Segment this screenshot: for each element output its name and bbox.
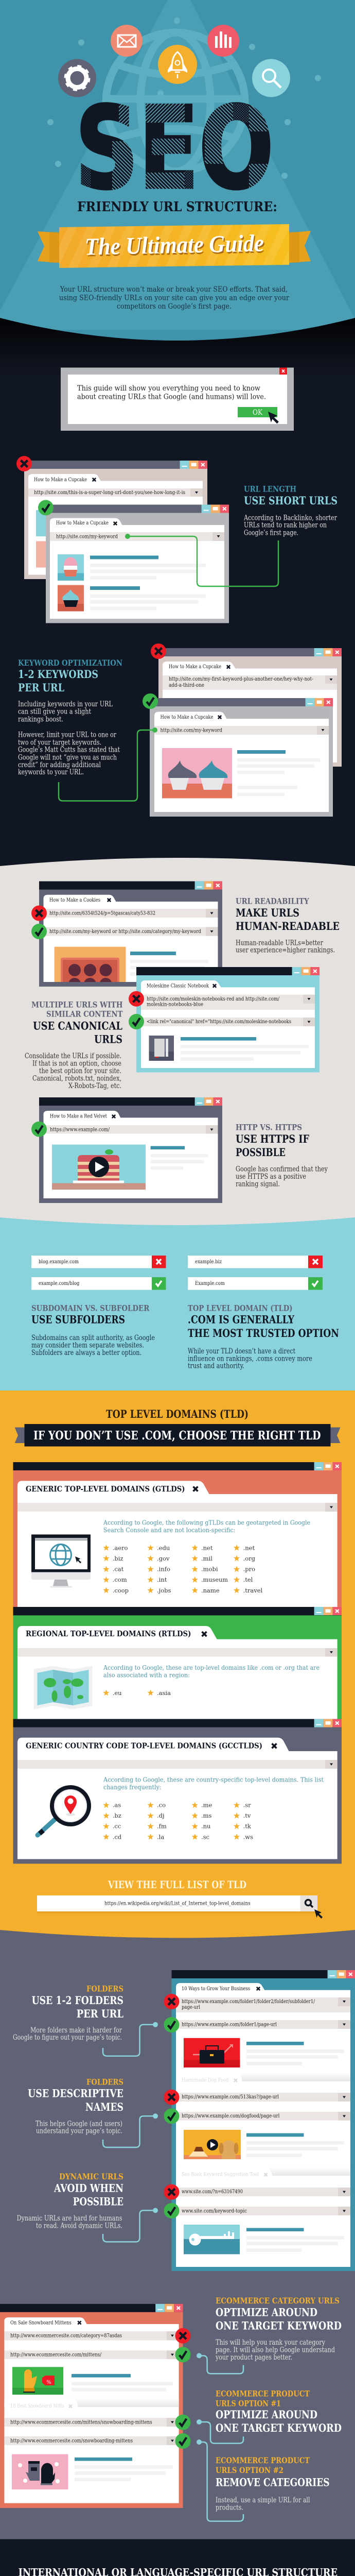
- text: canonical URLs: Consolidate the URLs if possible.: [25, 1052, 121, 1060]
- text: use 1-2 folders: [13, 1984, 123, 2042]
- text: ecommerce product option 2: [216, 2455, 330, 2512]
- panel: subdomain vs subfolder: [31, 1256, 166, 1357]
- connector: keyword: [59, 727, 157, 801]
- connector: short URL: [125, 534, 278, 586]
- panel: subdomain vs subfolder: Subfolders are always a better option.: [31, 1349, 141, 1357]
- panel: top level domain: Example.com: [195, 1280, 225, 1286]
- faded tab: dog food: [176, 2073, 350, 2083]
- list: country code TLDs: .sc: [201, 1833, 209, 1840]
- text: ecommerce category URLs: OPTIMIZE AROUND: [216, 2306, 317, 2318]
- list: country code TLDs: .bz: [113, 1812, 121, 1819]
- text: HTTP vs HTTPS: USE HTTPS IF: [236, 1132, 309, 1145]
- browser: short URL: How to Make a Cupcake: [56, 520, 109, 526]
- list: country code TLDs: .fm: [157, 1823, 167, 1830]
- icon: magnifier: [252, 59, 290, 97]
- icon: rocket: [158, 45, 197, 84]
- browser: generic country code TLDs: GENERIC COUNTRY CODE TOP-LEVEL DOMAINS (GCCTLDS): [26, 1741, 262, 1750]
- ribbon: the ultimate guide: The Ultimate Guide: [85, 231, 265, 262]
- panel: top level domain: example.biz: [195, 1259, 222, 1265]
- search bar: full list of TLD: https://en.wikipedia.org/wiki/List_of_Internet_top-level_domains: [104, 1900, 251, 1906]
- browser: keyword URL: http://site.com/my-keyword: [161, 727, 222, 734]
- list: country code TLDs: .co: [157, 1801, 166, 1808]
- text: URL length: URL LENGTH: [244, 484, 296, 494]
- list: country code TLDs: .dj: [157, 1812, 165, 1819]
- list: generic TLDs: .mil: [201, 1555, 212, 1562]
- ribbon: the ultimate guide: The Ultimate Guide: [84, 230, 264, 261]
- text: keyword optimization: keywords to your URL.: [18, 768, 84, 776]
- browser: generic country code TLDs: changes frequently:: [103, 1784, 162, 1791]
- text: HTTP vs HTTPS: ranking signal.: [236, 1180, 280, 1188]
- browser: folders stack: https://www.example.com/folder1/page-url: [182, 2022, 277, 2028]
- list: country code TLDs: .ms: [201, 1812, 212, 1819]
- text: ecommerce product option 1: OPTIMIZE AROUND: [216, 2408, 317, 2421]
- icon: monitor globe: [31, 1534, 91, 1588]
- intro paragraph: [59, 285, 290, 311]
- text: ecommerce product option 2: REMOVE CATEGORIES: [216, 2476, 330, 2488]
- browser: regional TLDs: REGIONAL TOP-LEVEL DOMAINS (RTLDS): [26, 1630, 191, 1638]
- list: country code TLDs: .la: [157, 1833, 164, 1840]
- illustration: sale mitten: %: [46, 2380, 51, 2385]
- text: URL length: [243, 484, 338, 537]
- faded tab: dog food: Homemade Dog Food: [182, 2077, 229, 2083]
- text: use descriptive names: FOLDERS: [86, 2077, 123, 2087]
- list: generic TLDs: .mobi: [201, 1565, 218, 1572]
- background globe and dots: [47, 18, 321, 179]
- browser: moleskine canonical: [136, 967, 319, 1072]
- text: dynamic URLs: DYNAMIC URLS: [59, 2172, 123, 2181]
- list: country code TLDs: .tk: [243, 1823, 252, 1830]
- browser: short URL: http://site.com/my-keyword: [56, 534, 118, 540]
- panel: subdomain vs subfolder: USE SUBFOLDERS: [31, 1313, 125, 1326]
- text: HTTP vs HTTPS: POSSIBLE: [236, 1146, 286, 1159]
- list: generic TLDs: .net: [243, 1544, 255, 1551]
- text: ecommerce category URLs: your product pages better.: [215, 2353, 292, 2362]
- text: keyword optimization: two of your target keywords.: [18, 738, 101, 747]
- list: generic TLDs: .com: [113, 1576, 127, 1583]
- browser: moleskine canonical: <link rel="canonical" href="https://site.com/moleskine-notebooks: [147, 1019, 291, 1025]
- illustration: two cupcakes: [162, 748, 232, 798]
- ribbon: the ultimate guide: [38, 224, 311, 268]
- browser: moleskine canonical: http://site.com/moleskin-notebooks-red and http://site.com/: [147, 996, 279, 1002]
- text: keyword optimization: Google’s Matt Cutts has stated that: [18, 746, 120, 754]
- list: country code TLDs: .cd: [113, 1833, 122, 1840]
- browser: long URL: [24, 461, 207, 579]
- text: HTTP vs HTTPS: Google has confirmed that they: [236, 1165, 328, 1173]
- dialog box: This guide will show you everything you need to know: [77, 384, 260, 393]
- illustration: briefcase: [184, 2038, 240, 2067]
- browser: folders stack: 10 Ways to Grow Your Business: [182, 1986, 250, 1992]
- browser: regional TLDs: [13, 1607, 342, 1719]
- browser: folders stack: https://www.example.com/dogfood/page-url: [182, 2113, 280, 2119]
- browser: generic country code TLDs: According to Google, these are country-specific top-level domains. This list: [103, 1776, 324, 1784]
- header panel: [38, 18, 321, 311]
- intro paragraph: Your URL structure won’t make or break your SEO efforts. That said,: [60, 285, 288, 294]
- icon: check badge: [31, 924, 47, 939]
- list: generic TLDs: .coop: [113, 1587, 129, 1594]
- text: URL readability: user experience=higher rankings.: [236, 946, 335, 955]
- text: keyword optimization: can still give you a slight: [18, 708, 91, 716]
- browser: regional TLDs: According to Google, these are top-level domains like .com or .org that are: [103, 1664, 319, 1671]
- list: generic TLDs: .org: [243, 1555, 256, 1562]
- text: ecommerce product option 2: ECOMMERCE PRODUCT: [216, 2455, 310, 2465]
- browser: too many keywords: How to Make a Cupcake: [169, 664, 221, 670]
- icon: cross badge: [16, 456, 32, 471]
- search bar: full list of TLD: [37, 1878, 323, 1919]
- text: use 1-2 folders: More folders make it harder for: [30, 2026, 122, 2035]
- list: regional TLDs: [103, 1689, 171, 1697]
- browser: too many keywords: add-a-third-one: [169, 682, 204, 688]
- text: ecommerce product option 2: products.: [216, 2504, 243, 2512]
- list: generic TLDs: .info: [157, 1565, 170, 1572]
- list: generic TLDs: .name: [201, 1587, 220, 1594]
- illustration: cupcake tile: [58, 585, 84, 612]
- text: URL length: USE SHORT URLS: [244, 494, 338, 507]
- browser: too many keywords: http://site.com/my-first-keyword-plus-another-one/hey-why-not-: [169, 676, 313, 682]
- icon: check badge: [143, 693, 158, 709]
- text: use descriptive names: understand your page’s topic.: [36, 2127, 122, 2136]
- browser: HTTPS: https://www.example.com/: [50, 1126, 110, 1132]
- browser: folders stack: [172, 1970, 355, 2271]
- browser: folders stack: www.site.com/keyword-topic: [182, 2208, 247, 2214]
- browser: folders stack: https://www.example.com/folder1/folder2/folder/subfolder1/: [182, 1998, 315, 2005]
- browser: long URL: http://site.com/this-is-a-super-long-url-dont-you/see-how-long-it-is: [34, 489, 185, 496]
- browser: generic country code TLDs: [13, 1719, 342, 1863]
- text: keyword optimization: 1-2 KEYWORDS: [18, 668, 98, 681]
- connectors: ecommerce: [197, 2353, 243, 2521]
- browser: moleskine canonical: Moleskine Classic Notebook: [147, 983, 209, 989]
- icon: check badge: [31, 1122, 47, 1137]
- icon: gear: [58, 59, 96, 97]
- list: country code TLDs: .cc: [113, 1823, 121, 1830]
- dialog box: [61, 368, 294, 431]
- text: HTTP vs HTTPS: HTTP VS. HTTPS: [236, 1122, 302, 1132]
- browser: keyword URL: How to Make a Cupcake: [161, 714, 213, 720]
- list: generic TLDs: .biz: [113, 1555, 123, 1562]
- browser: regional TLDs: also associated with a region:: [103, 1671, 190, 1679]
- intro paragraph: competitors on Google’s first page.: [117, 302, 232, 311]
- icon: cross badge: [129, 991, 144, 1007]
- text: ecommerce product option 1: [216, 2389, 342, 2434]
- browser: ecommerce: http://www.ecommercesite.com/category=87asdas: [10, 2333, 122, 2339]
- browser: generic TLDs: According to Google, the following gTLDs can be geotargeted in Google: [103, 1519, 310, 1526]
- list: generic TLDs: .travel: [243, 1587, 263, 1594]
- text: use descriptive names: [28, 2077, 123, 2136]
- browser: cookies readable URLs: How to Make a Cookies: [49, 897, 100, 903]
- list: generic TLDs: .gov: [157, 1555, 170, 1562]
- browser: folders stack: www.site.com/?n=63167490: [182, 2189, 243, 2195]
- text: canonical URLs: SIMILAR CONTENT: [46, 1009, 123, 1019]
- text: keyword optimization: However, limit your URL to one or: [18, 731, 116, 739]
- list: generic TLDs: .museum: [201, 1576, 228, 1583]
- list: generic TLDs: .tel: [243, 1576, 253, 1583]
- text: use 1-2 folders: PER URL: [77, 2007, 123, 2020]
- panel: top level domain: [188, 1256, 339, 1370]
- icon: world map: [34, 1666, 93, 1709]
- heading: top level domains: TOP LEVEL DOMAINS (TLD): [106, 1408, 248, 1420]
- text: HTTP vs HTTPS: [236, 1122, 328, 1188]
- list: country code TLDs: .me: [201, 1801, 212, 1808]
- browser: ecommerce: [0, 2304, 183, 2508]
- panel: subdomain vs subfolder: Subdomains can split authority, as Google: [31, 1334, 155, 1342]
- faded tab: keyword tool: [176, 2167, 350, 2177]
- panel: subdomain vs subfolder: example.com/blog: [39, 1280, 80, 1286]
- intro paragraph: using SEO-friendly URLs on your site can give you an edge over your: [59, 294, 290, 302]
- panel: top level domain: .COM IS GENERALLY: [188, 1313, 295, 1326]
- text: use descriptive names: This helps Google (and users): [36, 2120, 122, 2128]
- browser: long URL: How to Make a Cupcake: [34, 477, 87, 483]
- browser: cookies readable URLs: [39, 882, 222, 991]
- text: use descriptive names: USE DESCRIPTIVE: [28, 2087, 123, 2100]
- icon: check badge: [129, 1014, 144, 1029]
- text: keyword optimization: Including keywords in your URL: [18, 700, 113, 708]
- list: generic TLDs: [103, 1544, 263, 1594]
- illustration: cookies in oven: [55, 947, 126, 982]
- browser: cookies readable URLs: http://site.com/my-keyword or http://site.com/category/my-keyword: [49, 928, 201, 935]
- search bar: full list of TLD: VIEW THE FULL LIST OF TLD: [108, 1878, 246, 1891]
- text: keyword optimization: credit” for adding additional: [18, 761, 101, 769]
- list: generic TLDs: .cat: [113, 1565, 124, 1572]
- icon: cross badge: [151, 643, 166, 659]
- panel: top level domain: influence on rankings, .coms convey more: [188, 1355, 312, 1363]
- browser: folders stack: page-url: [182, 2004, 201, 2010]
- text: keyword optimization: rankings boost.: [18, 715, 63, 723]
- panel: top level domain: TOP LEVEL DOMAIN (TLD): [188, 1303, 292, 1313]
- dialog box: OK: [253, 409, 263, 417]
- text: canonical URLs: MULTIPLE URLS WITH: [31, 1000, 122, 1010]
- faded tab: best mitts: [4, 2398, 179, 2409]
- list: country code TLDs: .tv: [243, 1812, 251, 1819]
- text: dynamic URLs: Dynamic URLs are hard for humans: [16, 2214, 122, 2223]
- browser: generic TLDs: Search Console and are not location-specific:: [103, 1527, 236, 1534]
- icon: mail: [111, 25, 143, 57]
- text: canonical URLs: [25, 1000, 123, 1090]
- text: canonical URLs: USE CANONICAL: [33, 1019, 122, 1032]
- text: URL readability: MAKE URLS: [236, 906, 299, 919]
- text: use descriptive names: NAMES: [85, 2100, 123, 2113]
- text: URL length: URLs tend to rank higher on: [244, 521, 327, 530]
- browser: ecommerce: http://www.ecommercesite.com/mittens/snowboarding-mittens: [10, 2419, 152, 2426]
- browser: ecommerce: http://www.ecommercesite.com/snowboarding-mittens: [10, 2437, 133, 2444]
- panel: subdomain vs subfolder: SUBDOMAIN VS. SUBFOLDER: [31, 1303, 149, 1313]
- text: ecommerce category URLs: [215, 2296, 342, 2362]
- illustration: dog food video: [184, 2130, 241, 2159]
- heading: top level domains: [15, 1408, 341, 1447]
- browser: short URL: [46, 505, 229, 623]
- title: SEO: SEO: [75, 82, 274, 214]
- icon: bar chart: [207, 25, 239, 57]
- text: ecommerce product option 1: ECOMMERCE PRODUCT: [216, 2389, 310, 2399]
- text: use 1-2 folders: FOLDERS: [86, 1984, 123, 1993]
- text: ecommerce category URLs: This will help you rank your category: [216, 2338, 325, 2347]
- faded tab: best mitts: 18 Best Snowboard Mitts: [10, 2403, 64, 2409]
- browser: moleskine canonical: moleskin-notebooks-blue: [147, 1002, 203, 1008]
- text: canonical URLs: Canonical, robots.txt, noindex,: [32, 1074, 121, 1082]
- text: dynamic URLs: POSSIBLE: [73, 2195, 123, 2208]
- text: URL readability: HUMAN-READABLE: [236, 920, 340, 933]
- browser: folders stack: https://www.example.com/513kas?/page-url: [182, 2094, 279, 2100]
- list: country code TLDs: .nu: [201, 1823, 210, 1830]
- text: dynamic URLs: AVOID WHEN: [54, 2182, 123, 2195]
- list: generic TLDs: .net: [201, 1544, 213, 1551]
- text: URL length: According to Backlinko, shorter: [243, 514, 337, 522]
- browser: generic TLDs: [13, 1462, 342, 1607]
- list: country code TLDs: [103, 1801, 253, 1840]
- icons: ecommerce badges: [175, 2328, 190, 2449]
- list: generic TLDs: .edu: [157, 1544, 170, 1551]
- text: URL readability: [236, 896, 340, 955]
- list: generic TLDs: .int: [157, 1576, 167, 1583]
- browser: ecommerce: On Sale Snowboard Mittens: [10, 2320, 72, 2326]
- panel: top level domain: While your TLD doesn’t have a direct: [188, 1347, 295, 1355]
- browser: generic TLDs: GENERIC TOP-LEVEL DOMAINS (GTLDS): [26, 1485, 185, 1494]
- icon: check badge: [38, 500, 54, 515]
- list: generic TLDs: .pro: [243, 1565, 255, 1572]
- illustration: cake video: [52, 1145, 146, 1190]
- list: country code TLDs: .ws: [243, 1833, 253, 1840]
- text: dynamic URLs: to read. Avoid dynamic URLs.: [36, 2222, 122, 2230]
- text: keyword optimization: [18, 658, 122, 776]
- text: canonical URLs: X-Robots-Tag, etc.: [68, 1082, 121, 1090]
- list: generic TLDs: .jobs: [157, 1587, 171, 1594]
- panel: top level domain: trust and authority.: [188, 1362, 244, 1370]
- text: ecommerce product option 2: Instead, use a simple URL for all: [216, 2496, 310, 2504]
- text: ecommerce product option 2: URLS OPTION #2: [216, 2465, 283, 2475]
- browser: keyword URL: [150, 698, 333, 817]
- text: ecommerce category URLs: ECOMMERCE CATEGORY URLS: [216, 2296, 340, 2306]
- text: ecommerce product option 1: URLS OPTION #1: [216, 2399, 281, 2408]
- illustration: mittens: [12, 2454, 68, 2489]
- text: keyword optimization: KEYWORD OPTIMIZATION: [18, 658, 122, 668]
- text: URL length: Google’s first page.: [244, 529, 298, 537]
- list: generic TLDs: .aero: [113, 1544, 128, 1551]
- panel: subdomain vs subfolder: may consider them separate websites.: [31, 1342, 144, 1350]
- text: canonical URLs: If that is not an option, choose: [32, 1059, 121, 1067]
- connectors: folders: [103, 2022, 158, 2242]
- text: URL readability: Human-readable URLs=better: [236, 939, 323, 947]
- text: use 1-2 folders: USE 1-2 FOLDERS: [32, 1994, 123, 2007]
- illustration: notebook: [149, 1036, 174, 1061]
- text: HTTP vs HTTPS: use HTTPS as a positive: [236, 1173, 306, 1181]
- text: keyword optimization: PER URL: [18, 681, 64, 694]
- browser: HTTPS: [39, 1097, 222, 1203]
- text: URL readability: URL READABILITY: [236, 896, 309, 906]
- text: use 1-2 folders: Google to figure out your page’s topic.: [13, 2033, 122, 2042]
- text: dynamic URLs: [16, 2172, 123, 2230]
- browser: ecommerce: http://www.ecommercesite.com/mittens/: [10, 2352, 101, 2358]
- dialog box: about creating URLs that Google (and humans) will love.: [77, 393, 266, 401]
- text: keyword optimization: Google will not “give you as much: [18, 753, 117, 761]
- icon: cross badge: [31, 906, 47, 921]
- subtitle: FRIENDLY URL STRUCTURE:: [77, 199, 277, 215]
- list: country code TLDs: .as: [113, 1801, 121, 1808]
- list: regional TLDs: .eu: [113, 1689, 122, 1697]
- illustration: key: [184, 2225, 240, 2254]
- browser: cookies readable URLs: http://site.com/6354t524/p=5tgascas/caty53-832: [49, 910, 155, 916]
- text: canonical URLs: the best option for your site.: [39, 1067, 121, 1075]
- browser: HTTPS: How to Make a Red Velvet: [50, 1113, 108, 1119]
- icons: folder badges: [164, 1994, 179, 2218]
- list: country code TLDs: .sr: [243, 1801, 251, 1808]
- text: canonical URLs: URLS: [94, 1033, 122, 1046]
- list: regional TLDs: .asia: [157, 1689, 171, 1697]
- icon: magnifier with pin: [38, 1787, 89, 1835]
- browser: too many keywords: [158, 648, 342, 767]
- panel: subdomain vs subfolder: blog.example.com: [39, 1259, 79, 1265]
- illustration: cupcake tile: [58, 554, 84, 581]
- faded tab: keyword tool: Seo Book Keyword Suggestion Tool: [182, 2171, 259, 2177]
- illustration: sale mitten: [12, 2367, 63, 2395]
